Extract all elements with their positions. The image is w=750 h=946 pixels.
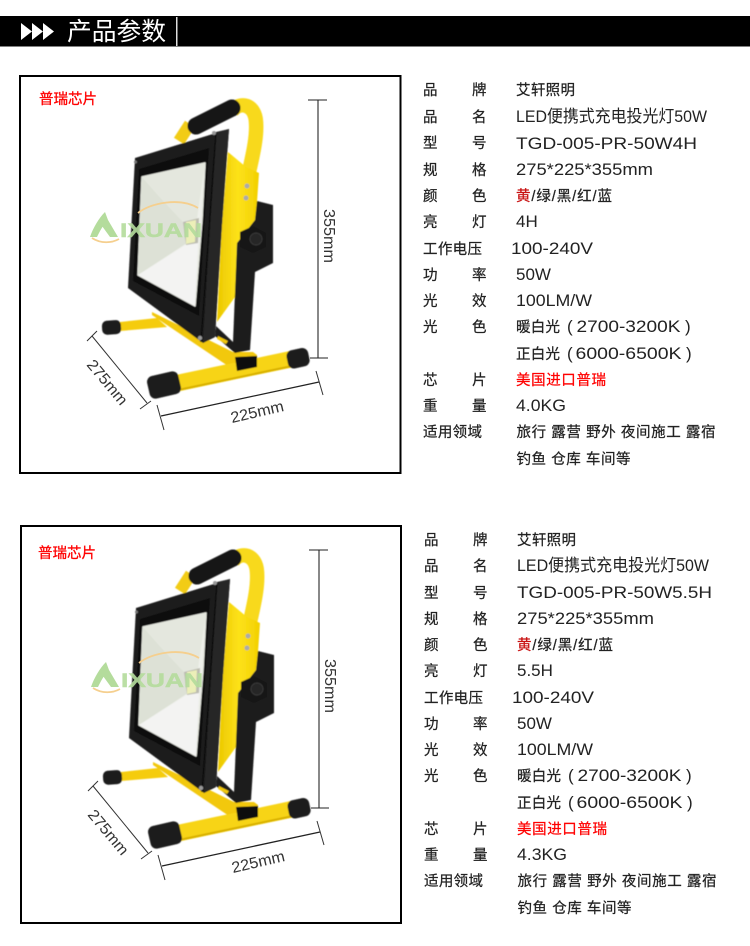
row: power: 率 bbox=[472, 267, 486, 284]
row: warm light bbox=[423, 317, 691, 336]
row: weight bbox=[423, 396, 566, 415]
row: power bbox=[424, 714, 552, 733]
row: warm light: 暖白光 bbox=[517, 768, 561, 785]
row: efficacy: 光 bbox=[423, 293, 438, 310]
row: light time: 5.5H bbox=[517, 661, 553, 680]
row: white light: ) bbox=[687, 793, 693, 812]
row: weight: 重 bbox=[424, 847, 438, 864]
row: size: 规 bbox=[423, 162, 438, 179]
row: warm light: ( bbox=[567, 317, 573, 336]
chip label: 普瑞芯片 bbox=[39, 91, 97, 108]
row: brand: 艾轩照明 bbox=[516, 82, 575, 99]
row: weight: 重 bbox=[423, 398, 438, 415]
row: model bbox=[423, 134, 697, 153]
row: power: 50W bbox=[517, 714, 552, 733]
chip label: 普瑞芯片 bbox=[38, 545, 96, 562]
row: chip bbox=[424, 821, 607, 838]
spec table 2 bbox=[424, 532, 716, 917]
row: white light: 正白光 bbox=[517, 795, 561, 812]
row: model: 号 bbox=[472, 136, 486, 152]
row: efficacy: 100LM/W bbox=[516, 291, 592, 310]
row: warm light bbox=[424, 766, 692, 785]
watermark: AIXUAN bbox=[91, 652, 203, 692]
panel: product diagram 2 bbox=[21, 526, 401, 923]
dimension: width 225mm bbox=[158, 821, 324, 880]
row: name bbox=[424, 556, 709, 575]
row: light time bbox=[424, 661, 553, 680]
row: applications: 旅行 露营 野外 夜间施工 露宿 bbox=[518, 873, 716, 890]
row: efficacy: 效 bbox=[473, 742, 488, 759]
watermark: AIXUAN: IXUAN bbox=[121, 670, 203, 692]
row: power: 功 bbox=[424, 716, 438, 733]
row: chip: 芯 bbox=[424, 821, 438, 838]
panel: product diagram 1 bbox=[20, 76, 400, 473]
row: name: 名 bbox=[473, 558, 488, 575]
row: brand bbox=[423, 82, 575, 99]
row: weight: 量 bbox=[473, 848, 488, 864]
row: weight: 4.3KG bbox=[517, 845, 567, 864]
row: efficacy: 100LM/W bbox=[517, 740, 593, 759]
row: efficacy: 光 bbox=[424, 742, 438, 759]
row: name: LED便携式充电投光灯50W bbox=[516, 107, 707, 126]
row: applications bbox=[423, 424, 716, 441]
row: white light bbox=[516, 344, 692, 363]
row: white light: 6000-6500K bbox=[576, 793, 683, 812]
row: applications bbox=[424, 873, 716, 890]
row: colour: 色 bbox=[472, 188, 486, 205]
row: size bbox=[424, 609, 654, 628]
row: warm light: 暖白光 bbox=[516, 319, 560, 336]
row: applications continued: 钓鱼 仓库 车间等 bbox=[516, 450, 630, 468]
icon: triple arrows bbox=[21, 23, 54, 40]
row: applications: 适用领域 bbox=[424, 873, 483, 890]
dimension: height 355mm: 355mm bbox=[321, 659, 338, 713]
row: size: 格 bbox=[472, 162, 487, 179]
row: weight: 量 bbox=[472, 399, 486, 415]
row: name: LED便携式充电投光灯50W bbox=[517, 556, 709, 575]
row: white light: ( bbox=[567, 344, 573, 363]
row: colour bbox=[423, 188, 612, 205]
row: light time: 4H bbox=[516, 212, 538, 231]
row: model: 型 bbox=[423, 135, 438, 152]
row: brand: 品 bbox=[423, 82, 438, 99]
row: size: 275*225*355mm bbox=[516, 160, 653, 179]
row: warm light: 2700-3200K bbox=[576, 317, 681, 336]
row: name bbox=[423, 107, 707, 126]
row: warm light: ) bbox=[685, 317, 691, 336]
heading: 产品参数 bbox=[67, 18, 166, 46]
row: colour: 黄/绿/黑/红/蓝 bbox=[516, 188, 612, 205]
row: warm light: ( bbox=[568, 766, 574, 785]
dimension: height 355mm bbox=[308, 100, 337, 358]
row: weight bbox=[424, 845, 567, 864]
row: white light: 正白光 bbox=[516, 346, 560, 363]
row: name: 品 bbox=[424, 558, 438, 575]
row: brand: 牌 bbox=[472, 82, 486, 99]
dimension: depth 275mm: 275mm bbox=[84, 807, 132, 859]
dimension: depth 275mm bbox=[84, 781, 152, 859]
row: voltage: 工作电压 bbox=[424, 690, 483, 707]
dimension: width 225mm bbox=[157, 371, 323, 430]
dimension: height 355mm bbox=[309, 550, 338, 808]
row: chip bbox=[423, 372, 606, 389]
row: size: 规 bbox=[424, 611, 438, 628]
row: applications: 旅行 露营 野外 夜间施工 露宿 bbox=[516, 424, 716, 441]
row: warm light: 光 bbox=[423, 319, 438, 336]
row: white light: ( bbox=[568, 793, 574, 812]
row: colour: 色 bbox=[473, 637, 488, 654]
row: power: 功 bbox=[423, 267, 438, 284]
row: colour: 黄/绿/黑/红/蓝 bbox=[517, 637, 613, 654]
row: chip: 片 bbox=[473, 821, 488, 838]
row: chip: 芯 bbox=[423, 372, 438, 389]
row: voltage: 100-240V bbox=[512, 688, 595, 707]
row: brand: 品 bbox=[424, 532, 438, 549]
row: white light bbox=[517, 793, 693, 812]
row: brand: 艾轩照明 bbox=[517, 532, 576, 549]
dimension: depth 275mm bbox=[83, 331, 151, 409]
row: white light: ) bbox=[686, 344, 692, 363]
row: voltage bbox=[424, 688, 595, 707]
row: light time bbox=[423, 212, 538, 231]
row: size bbox=[423, 160, 653, 179]
row: efficacy bbox=[423, 291, 592, 310]
spec table 1 bbox=[423, 82, 716, 468]
lamp illustration bbox=[103, 555, 312, 850]
row: model: TGD-005-PR-50W5.5H bbox=[517, 583, 712, 602]
row: warm light: 光 bbox=[424, 768, 438, 785]
watermark: AIXUAN: IXUAN bbox=[120, 220, 202, 242]
row: chip: 美国进口普瑞 bbox=[516, 372, 606, 389]
row: colour bbox=[424, 637, 613, 654]
row: size: 275*225*355mm bbox=[517, 609, 654, 628]
row: applications continued: 钓鱼 仓库 车间等 bbox=[518, 899, 632, 917]
dimension: width 225mm: 225mm bbox=[229, 398, 286, 427]
lamp illustration bbox=[102, 105, 311, 400]
row: light time: 灯 bbox=[472, 214, 486, 231]
row: applications: 适用领域 bbox=[423, 424, 482, 441]
row: efficacy bbox=[424, 740, 593, 759]
header bar bbox=[0, 16, 750, 46]
row: brand bbox=[424, 532, 576, 549]
row: model bbox=[424, 583, 712, 602]
row: light time: 灯 bbox=[473, 663, 488, 680]
row: white light: 6000-6500K bbox=[576, 344, 682, 363]
dimension: width 225mm: 225mm bbox=[230, 848, 287, 877]
row: model: 型 bbox=[424, 585, 438, 602]
row: light time: 亮 bbox=[423, 214, 438, 231]
row: chip: 美国进口普瑞 bbox=[517, 821, 607, 838]
row: power: 50W bbox=[516, 265, 551, 284]
row: warm light: 色 bbox=[472, 319, 486, 336]
row: name: 名 bbox=[472, 109, 486, 126]
row: voltage: 100-240V bbox=[511, 239, 594, 258]
row: light time: 亮 bbox=[424, 663, 438, 680]
row: size: 格 bbox=[473, 611, 488, 628]
dimension: height 355mm: 355mm bbox=[320, 209, 337, 263]
row: warm light: 2700-3200K bbox=[578, 766, 682, 785]
watermark: AIXUAN bbox=[90, 202, 202, 242]
row: chip: 片 bbox=[472, 372, 486, 389]
row: power bbox=[423, 265, 551, 284]
row: model: TGD-005-PR-50W4H bbox=[516, 134, 697, 153]
row: warm light: ) bbox=[686, 766, 692, 785]
row: colour: 颜 bbox=[424, 637, 438, 654]
row: brand: 牌 bbox=[473, 532, 488, 549]
row: power: 率 bbox=[473, 716, 488, 733]
row: warm light: 色 bbox=[473, 768, 488, 785]
row: voltage: 工作电压 bbox=[423, 241, 482, 258]
row: voltage bbox=[423, 239, 594, 258]
row: efficacy: 效 bbox=[472, 293, 487, 310]
row: weight: 4.0KG bbox=[516, 396, 566, 415]
row: colour: 颜 bbox=[423, 188, 438, 205]
dimension: depth 275mm: 275mm bbox=[83, 357, 131, 409]
row: name: 品 bbox=[423, 109, 438, 126]
row: model: 号 bbox=[473, 586, 488, 602]
